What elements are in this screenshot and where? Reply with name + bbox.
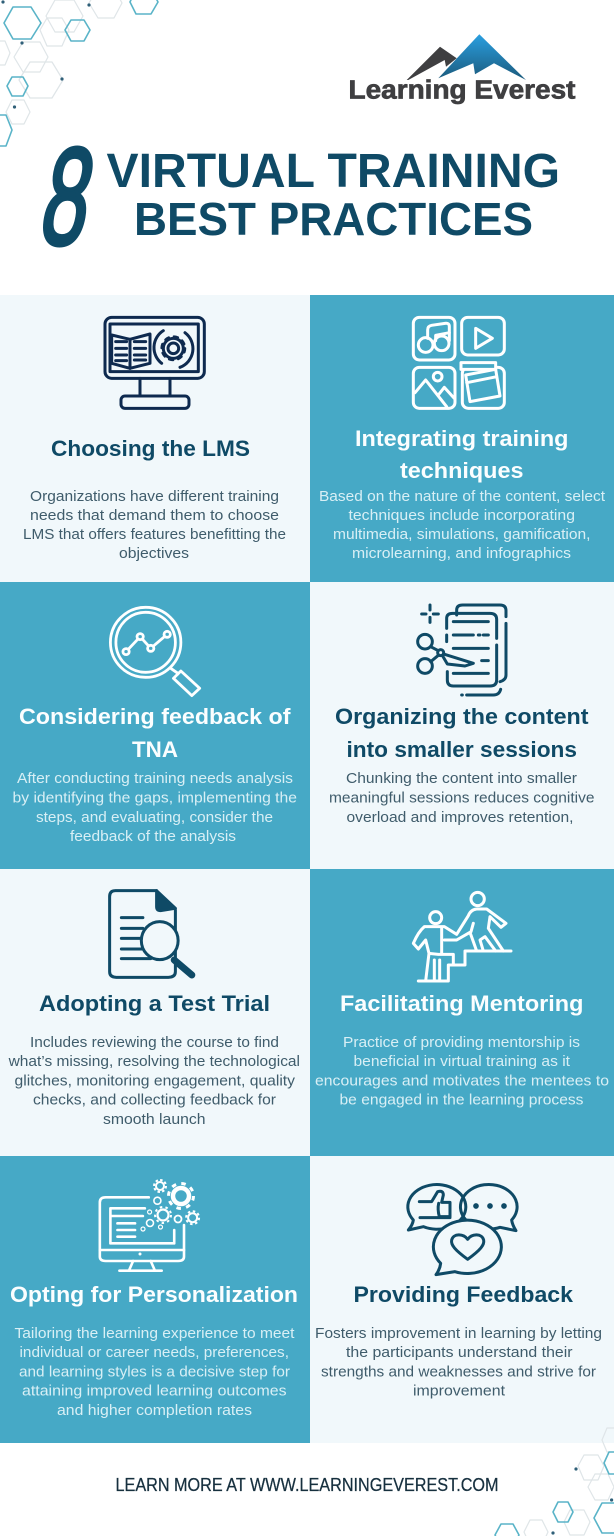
icon: mentor helping mentee up stairs: [413, 892, 511, 981]
icon: media tiles: [413, 317, 504, 408]
panel: considering feedback of TNA: [0, 582, 310, 869]
body text: [23, 489, 286, 562]
heading: [355, 426, 568, 483]
heading: Considering feedback of: [19, 704, 291, 729]
panel: organizing the content: [310, 582, 614, 869]
body text: Includes reviewing the course to find: [30, 1035, 279, 1051]
body text: multimedia, simulations, gamification,: [333, 527, 590, 543]
body text: and higher completion rates: [57, 1403, 252, 1419]
body text: steps, and evaluating, consider the: [36, 810, 273, 826]
icon: scissors cutting document: [418, 605, 506, 695]
body text: by identifying the gaps, implementing the: [12, 790, 297, 806]
body text: LMS that offers features benefitting the: [23, 527, 286, 543]
heading: Opting for Personalization: [10, 1282, 298, 1307]
body text: techniques include incorporating: [348, 508, 575, 524]
body text: Practice of providing mentorship is: [343, 1035, 580, 1051]
body text: be engaged in the learning process: [340, 1092, 584, 1108]
heading: [335, 704, 589, 762]
panel: integrating training techniques: [310, 295, 614, 582]
decorative hexagons: top left: [0, 0, 158, 146]
body text: feedback of the analysis: [70, 829, 236, 845]
body text: After conducting training needs analysis: [17, 771, 293, 787]
body text: Organizations have different training: [30, 489, 279, 505]
body text: meaningful sessions reduces cognitive: [329, 790, 594, 806]
title: [32, 120, 560, 274]
body text: what’s missing, resolving the technological: [8, 1054, 300, 1070]
heading: Facilitating Mentoring: [340, 991, 583, 1016]
panel: providing feedback: [310, 1156, 614, 1443]
body text: objectives: [119, 546, 189, 562]
body text: overload and improves retention,: [346, 810, 574, 826]
body text: [319, 489, 605, 562]
body text: microlearning, and infographics: [352, 546, 571, 562]
body text: [315, 1035, 609, 1108]
body text: checks, and collecting feedback for: [33, 1092, 276, 1108]
heading: Integrating training: [355, 426, 568, 451]
panel: facilitating mentoring: [310, 869, 614, 1156]
logo: Learning Everest: [348, 34, 576, 104]
icon: monitor with gears: [100, 1180, 199, 1271]
body text: [315, 1326, 602, 1400]
body text: needs that demand them to choose: [30, 508, 279, 524]
heading: Providing Feedback: [354, 1282, 573, 1307]
body text: improvement: [413, 1384, 505, 1400]
panel: opting for personalization: [0, 1156, 310, 1443]
body text: individual or career needs, preferences,: [20, 1345, 289, 1361]
body text: Chunking the content into smaller: [346, 771, 577, 787]
heading: Choosing the LMS: [51, 436, 250, 461]
body text: encourages and motivates the mentees to: [315, 1074, 609, 1090]
body text: smooth launch: [103, 1112, 206, 1128]
body text: strengths and weaknesses and strive for: [321, 1364, 596, 1380]
panel: choosing the LMS: [0, 295, 310, 582]
heading: techniques: [400, 458, 524, 483]
body text: the participants understand their: [346, 1345, 573, 1361]
body text: Tailoring the learning experience to meet: [14, 1326, 294, 1342]
body text: [8, 1035, 300, 1128]
icon: speech bubbles: [408, 1184, 517, 1275]
body text: [12, 771, 297, 845]
icon: magnifier with chart: [110, 607, 200, 696]
body text: attaining improved learning outcomes: [22, 1384, 287, 1400]
body text: [14, 1326, 294, 1419]
heading: into smaller sessions: [346, 737, 577, 762]
panel: adopting a test trial: [0, 869, 310, 1156]
decorative hexagons: bottom right: [495, 1428, 614, 1536]
icon: document with magnifier: [110, 891, 192, 977]
title line 2: BEST PRACTICES: [134, 193, 533, 245]
body text: Based on the nature of the content, select: [319, 489, 605, 505]
title number 8: 8: [32, 120, 105, 274]
body text: and learning styles is a decisive step for: [19, 1364, 290, 1380]
heading: TNA: [132, 737, 178, 762]
body text: [329, 771, 594, 826]
heading: [19, 704, 291, 762]
icon: monitor with book and gear: [105, 317, 204, 408]
body text: glitches, monitoring engagement, quality: [14, 1074, 296, 1090]
heading: Organizing the content: [335, 704, 589, 729]
title line 1: VIRTUAL TRAINING: [106, 145, 560, 198]
footer call to action: LEARN MORE AT WWW.LEARNINGEVEREST.COM: [116, 1475, 498, 1495]
body text: Fosters improvement in learning by letting: [315, 1326, 602, 1342]
logo: Learning Everest: Learning Everest: [348, 76, 576, 104]
body text: beneficial in virtual training as it: [354, 1054, 570, 1070]
heading: Adopting a Test Trial: [39, 991, 270, 1016]
